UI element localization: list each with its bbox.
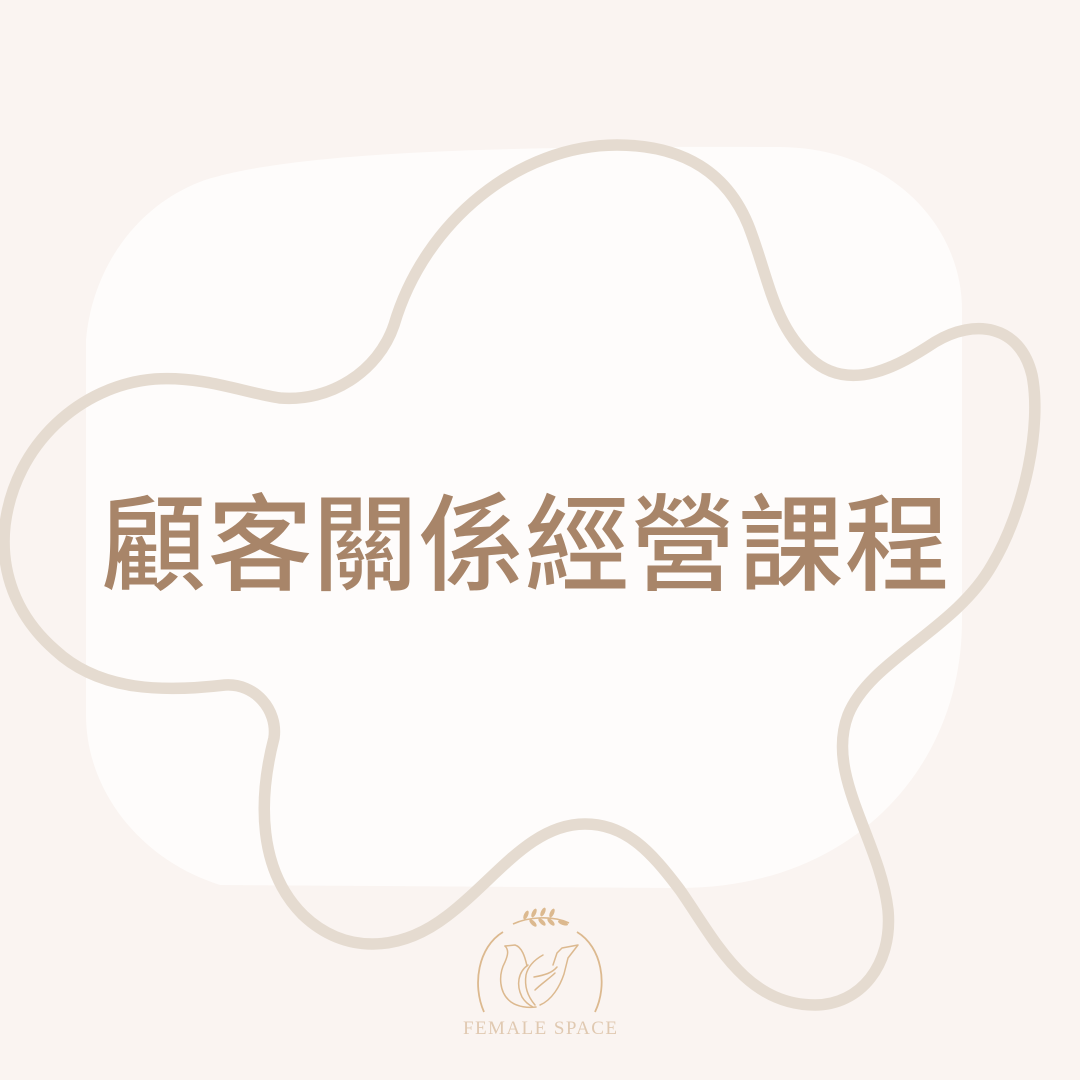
icon: circle arcs: [478, 932, 602, 1012]
wavy outline ribbon: [4, 145, 1035, 1005]
logo: Female Space: [463, 907, 617, 1039]
icon: dove and hand: [501, 945, 578, 1007]
logo wordmark: FEMALE SPACE: [463, 1018, 617, 1039]
title: 顧客關係經營課程: [101, 488, 950, 605]
panel: white rounded blob: [86, 147, 962, 888]
icon: wheat sprig: [513, 907, 569, 927]
